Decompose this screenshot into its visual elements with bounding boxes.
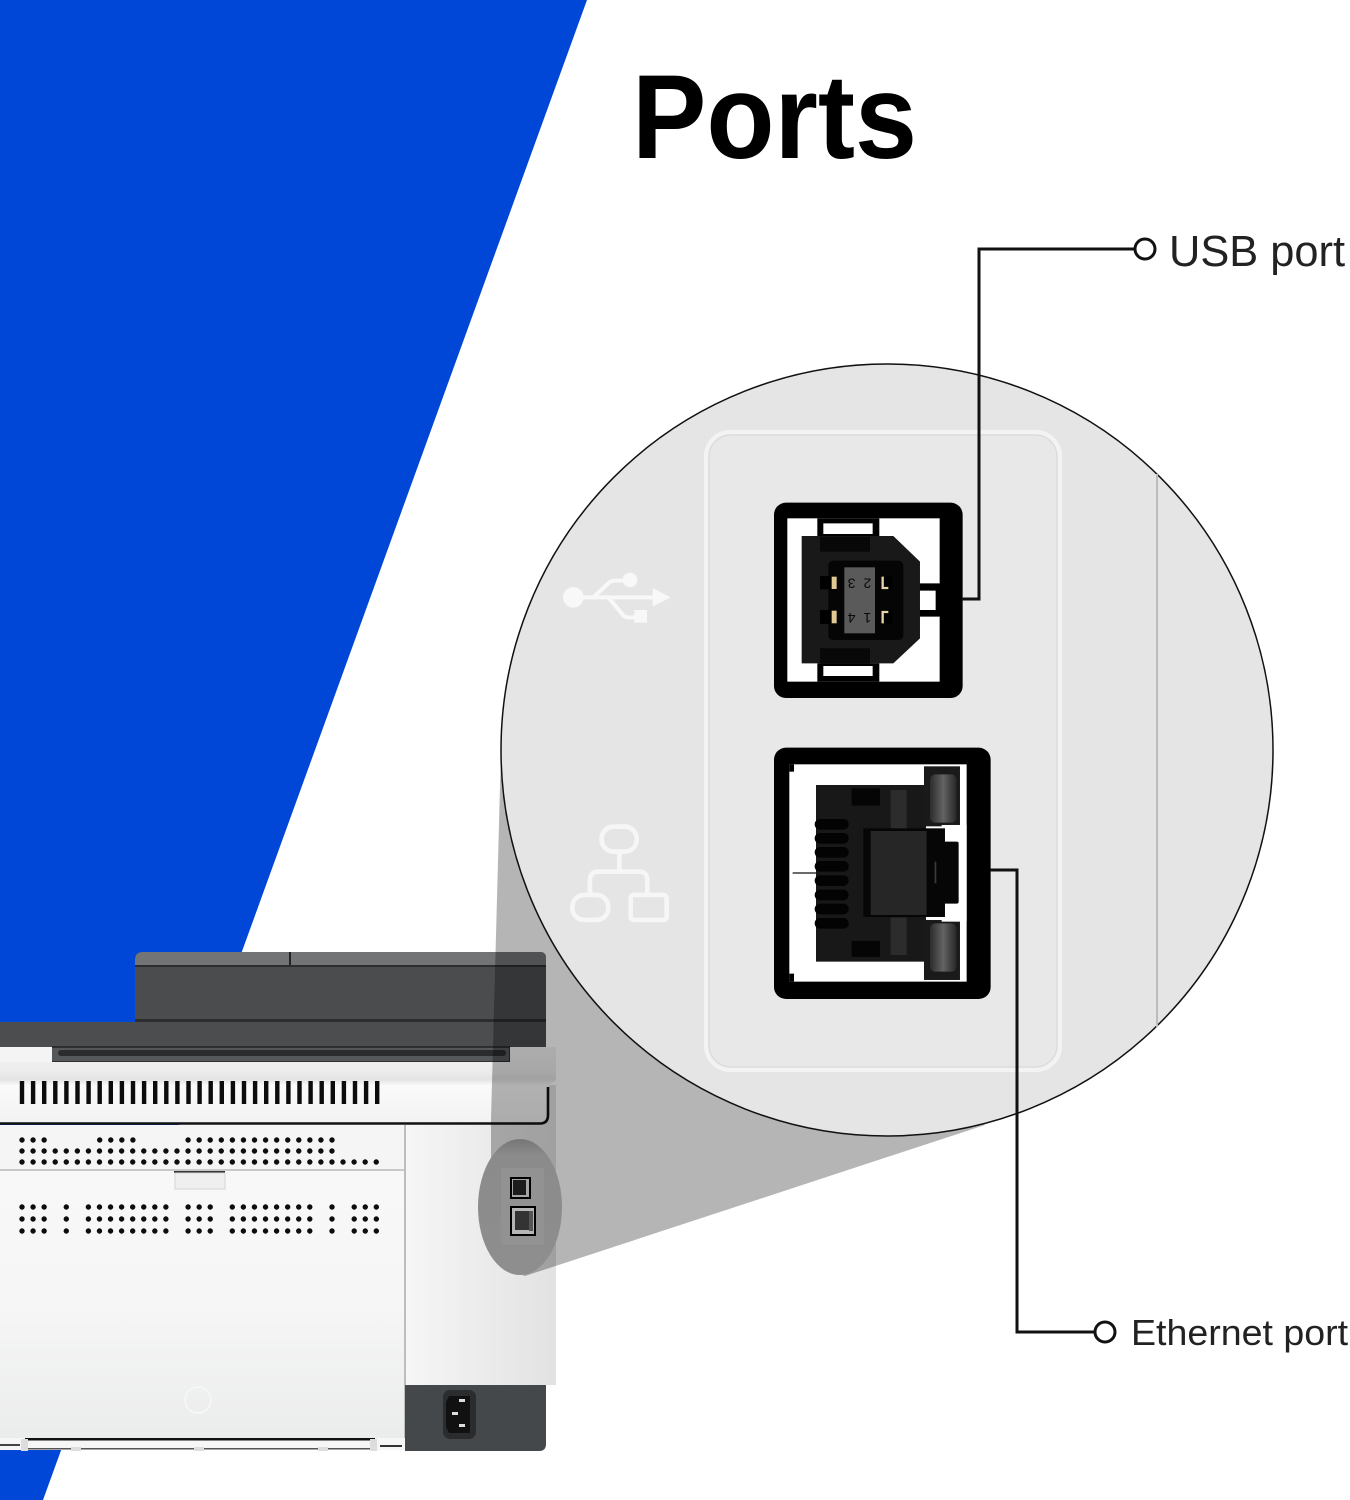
printer rear view <box>0 952 556 1451</box>
USB port: 4 <box>848 610 856 626</box>
USB port: 3 <box>848 576 856 592</box>
title: Ports <box>632 50 917 184</box>
printer base and power socket <box>405 1385 546 1451</box>
port plate <box>706 432 1060 1070</box>
printer dark mid band and paper slot <box>0 1022 546 1062</box>
printer bottom strip and feet <box>0 1438 405 1451</box>
blue diagonal background <box>0 0 587 1500</box>
USB port: 1 <box>863 610 871 626</box>
printer rear panels <box>0 1125 406 1439</box>
USB port: 2 <box>863 576 871 592</box>
icon: USB symbol <box>563 573 671 623</box>
printer scanner lid <box>135 952 546 1047</box>
icon: network symbol <box>572 827 667 920</box>
USB port label: USB port <box>1169 227 1345 276</box>
Ethernet leader line <box>990 870 1115 1342</box>
magnifier shadow cone <box>491 750 985 1276</box>
Ethernet port label: Ethernet port <box>1131 1312 1348 1353</box>
small port callout oval <box>478 1139 562 1275</box>
upper dot grille <box>22 1140 377 1162</box>
vent slots <box>22 1081 377 1104</box>
printer side panel <box>405 1085 556 1385</box>
magnified circle <box>501 364 1273 1136</box>
lower dot grille <box>22 1207 377 1231</box>
USB port <box>774 503 963 698</box>
USB leader line <box>962 239 1155 599</box>
printer white rear bar <box>0 1047 556 1124</box>
Ethernet port <box>774 748 991 999</box>
side strip <box>1156 474 1158 1027</box>
